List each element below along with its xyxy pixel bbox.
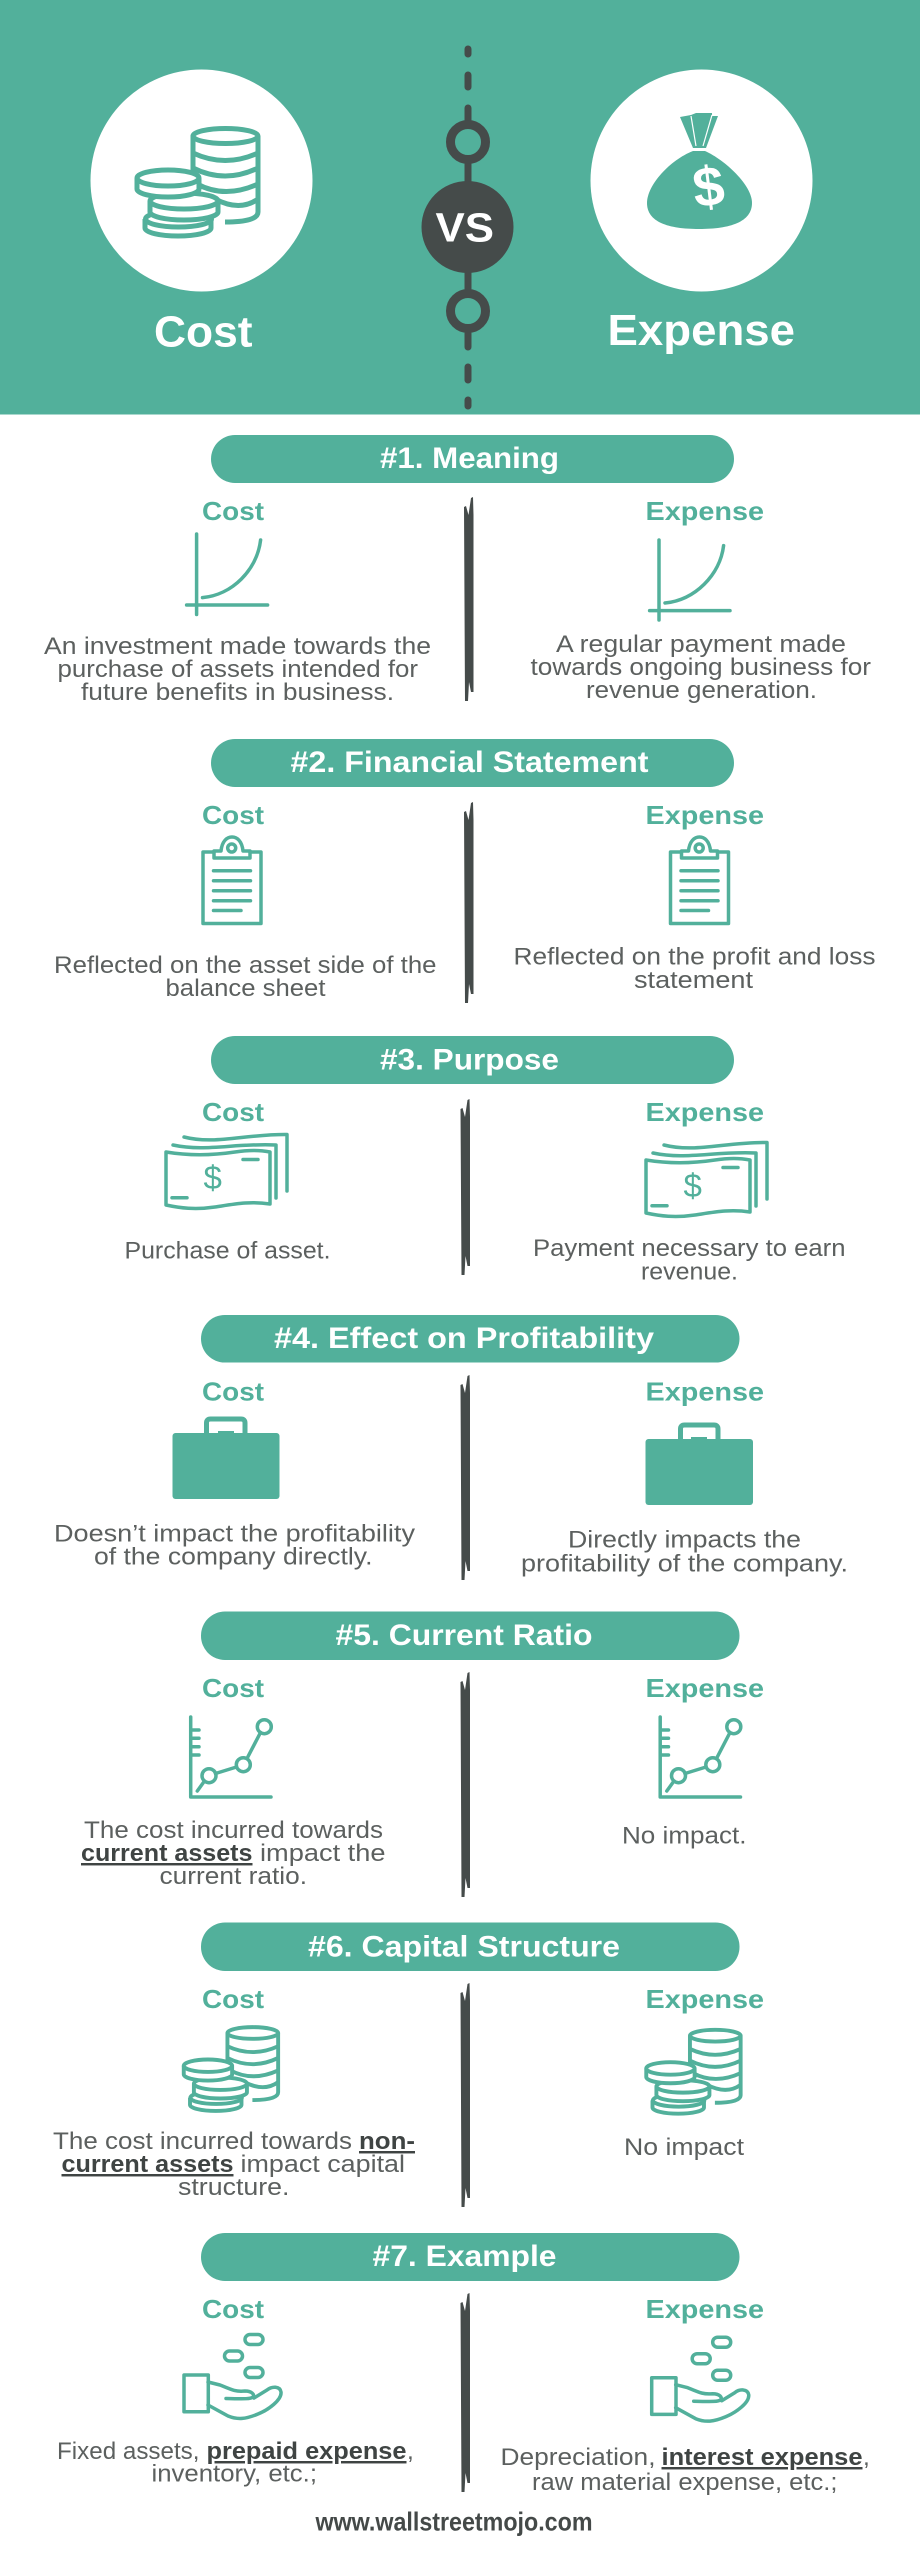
text: expense purpose: Payment necessary to earn xyxy=(533,1235,846,1262)
text: cost meaning xyxy=(44,633,431,706)
panel: #2 Financial Statement xyxy=(54,739,876,1003)
icon: growth curve cost xyxy=(187,534,268,614)
divider xyxy=(464,802,474,1003)
panel: #7 Example xyxy=(57,2233,870,2496)
label: Cost: Cost xyxy=(202,1376,264,1406)
heading xyxy=(201,1612,740,1660)
label: Expense: Expense xyxy=(646,1673,764,1703)
text: cost capital structure xyxy=(53,2128,415,2201)
text: expense meaning: revenue generation. xyxy=(586,677,817,704)
text: expense statement xyxy=(514,944,876,994)
icon: coins expense xyxy=(646,2030,741,2114)
text: cost example xyxy=(57,2438,414,2488)
heading: #4. Effect on Profitability xyxy=(274,1322,654,1355)
heading xyxy=(201,1315,740,1362)
label: Expense: Expense xyxy=(646,1984,764,2014)
label: Expense: Expense xyxy=(646,1097,764,1127)
text: cost example: Fixed assets, xyxy=(57,2438,200,2465)
icon: line chart expense xyxy=(660,1717,741,1797)
heading xyxy=(211,739,734,787)
divider xyxy=(460,1672,470,1897)
label: Cost: Cost xyxy=(202,1673,264,1703)
title: Cost: Cost xyxy=(154,308,253,356)
icon: coins cost xyxy=(184,2027,278,2111)
label: Cost: Cost xyxy=(202,496,264,526)
label: Expense: Expense xyxy=(646,496,764,526)
text: cost current ratio: The cost incurred towards xyxy=(84,1817,383,1844)
heading: #2. Financial Statement xyxy=(290,746,648,779)
divider xyxy=(460,2293,470,2492)
title: Expense: Expense xyxy=(608,306,795,355)
icon: briefcase expense xyxy=(646,1425,753,1505)
label: Expense: Expense xyxy=(646,1376,764,1406)
text: cost example: prepaid expense xyxy=(206,2438,406,2465)
label: Expense: Expense xyxy=(646,2294,764,2324)
text: cost statement: Reflected on the asset side of the xyxy=(54,952,437,979)
text: expense example: , xyxy=(863,2444,870,2471)
divider xyxy=(460,1983,470,2207)
icon: growth curve expense xyxy=(650,540,730,620)
text: expense profitability: Directly impacts the xyxy=(568,1526,801,1554)
text: expense capital structure: No impact xyxy=(624,2134,744,2161)
text: cost example: inventory, etc.; xyxy=(152,2460,317,2488)
label: Cost: Cost xyxy=(202,2294,264,2324)
text: expense example xyxy=(500,2444,870,2496)
icon: banknotes cost: $ xyxy=(204,1159,222,1196)
text: cost profitability: of the company directly. xyxy=(94,1544,372,1570)
icon: briefcase cost xyxy=(172,1419,280,1499)
heading: #3. Purpose xyxy=(380,1044,559,1076)
text: cost current ratio xyxy=(81,1817,386,1890)
heading: #1. Meaning xyxy=(380,442,559,475)
text: cost capital structure: impact capital xyxy=(240,2151,405,2178)
text: cost purpose: Purchase of asset. xyxy=(124,1238,330,1264)
text: expense purpose: revenue. xyxy=(641,1258,738,1286)
text: expense example: Depreciation, xyxy=(500,2444,656,2471)
divider xyxy=(460,1375,470,1580)
icon: line chart cost xyxy=(191,1717,271,1797)
vs connector: VS xyxy=(436,204,494,250)
heading xyxy=(201,1922,740,1971)
text: expense meaning: A regular payment made xyxy=(556,631,846,658)
label: Cost: Cost xyxy=(202,1984,264,2014)
text: cost statement: balance sheet xyxy=(166,975,326,1002)
text: expense example: interest expense xyxy=(662,2444,862,2471)
text: cost capital structure: The cost incurred towards xyxy=(53,2128,352,2155)
label: Cost: Cost xyxy=(202,1097,264,1127)
text: cost current ratio: current assets xyxy=(81,1840,252,1867)
panel: #3 Purpose xyxy=(124,1036,846,1286)
text: expense purpose xyxy=(533,1235,846,1286)
panel: #1 Meaning xyxy=(44,435,871,706)
icon: clipboard cost xyxy=(203,837,261,924)
footer: website: www.wallstreetmojo.com xyxy=(315,2506,592,2536)
text: expense meaning: towards ongoing business for xyxy=(530,654,871,681)
icon: banknotes expense: $ xyxy=(684,1167,702,1204)
text: expense current ratio: No impact. xyxy=(622,1822,746,1850)
heading: #5. Current Ratio xyxy=(336,1619,592,1652)
text: expense example: raw material expense, etc.; xyxy=(532,2469,838,2496)
text: cost meaning: An investment made towards the xyxy=(44,633,431,660)
divider xyxy=(464,497,474,701)
text: cost capital structure: non- xyxy=(359,2128,415,2155)
panel: #6 Capital Structure xyxy=(53,1922,764,2207)
text: cost example: , xyxy=(407,2438,414,2465)
panel: #5 Current Ratio xyxy=(81,1612,764,1897)
text: expense statement: statement xyxy=(634,967,753,994)
text: expense profitability: profitability of the company. xyxy=(521,1550,848,1578)
text: cost statement xyxy=(54,952,437,1002)
heading xyxy=(211,1036,734,1084)
text: expense profitability xyxy=(521,1526,848,1578)
vs connector xyxy=(422,49,514,406)
text: cost current ratio: impact the xyxy=(260,1840,386,1867)
heading xyxy=(211,435,734,483)
icon: white circle with money bag: $ xyxy=(689,153,728,220)
panel: header banner xyxy=(0,0,920,414)
label: Cost: Cost xyxy=(202,800,264,830)
icon: banknotes expense xyxy=(646,1142,767,1216)
text: cost profitability: Doesn’t impact the profitability xyxy=(54,1520,416,1548)
icon: white circle with coins xyxy=(90,70,312,292)
text: expense meaning xyxy=(530,631,871,704)
icon: clipboard expense xyxy=(670,837,728,924)
icon: hand with coins cost xyxy=(184,2334,281,2418)
icon: banknotes cost xyxy=(166,1134,287,1208)
text: expense statement: Reflected on the profit and loss xyxy=(514,944,876,970)
text: cost profitability xyxy=(54,1520,416,1570)
heading: #6. Capital Structure xyxy=(308,1930,620,1964)
text: cost capital structure: structure. xyxy=(178,2174,290,2201)
icon: white circle with money bag xyxy=(590,70,812,292)
text: cost meaning: purchase of assets intended for xyxy=(58,656,418,683)
text: cost capital structure: current assets xyxy=(62,2151,234,2178)
heading: #7. Example xyxy=(372,2240,556,2273)
divider xyxy=(460,1099,470,1275)
panel: #4 Effect on Profitability xyxy=(54,1315,848,1580)
heading xyxy=(201,2233,740,2281)
text: cost current ratio: current ratio. xyxy=(160,1863,307,1890)
text: cost meaning: future benefits in business. xyxy=(81,679,394,706)
label: Expense: Expense xyxy=(646,800,764,830)
icon: hand with coins expense xyxy=(652,2337,749,2421)
